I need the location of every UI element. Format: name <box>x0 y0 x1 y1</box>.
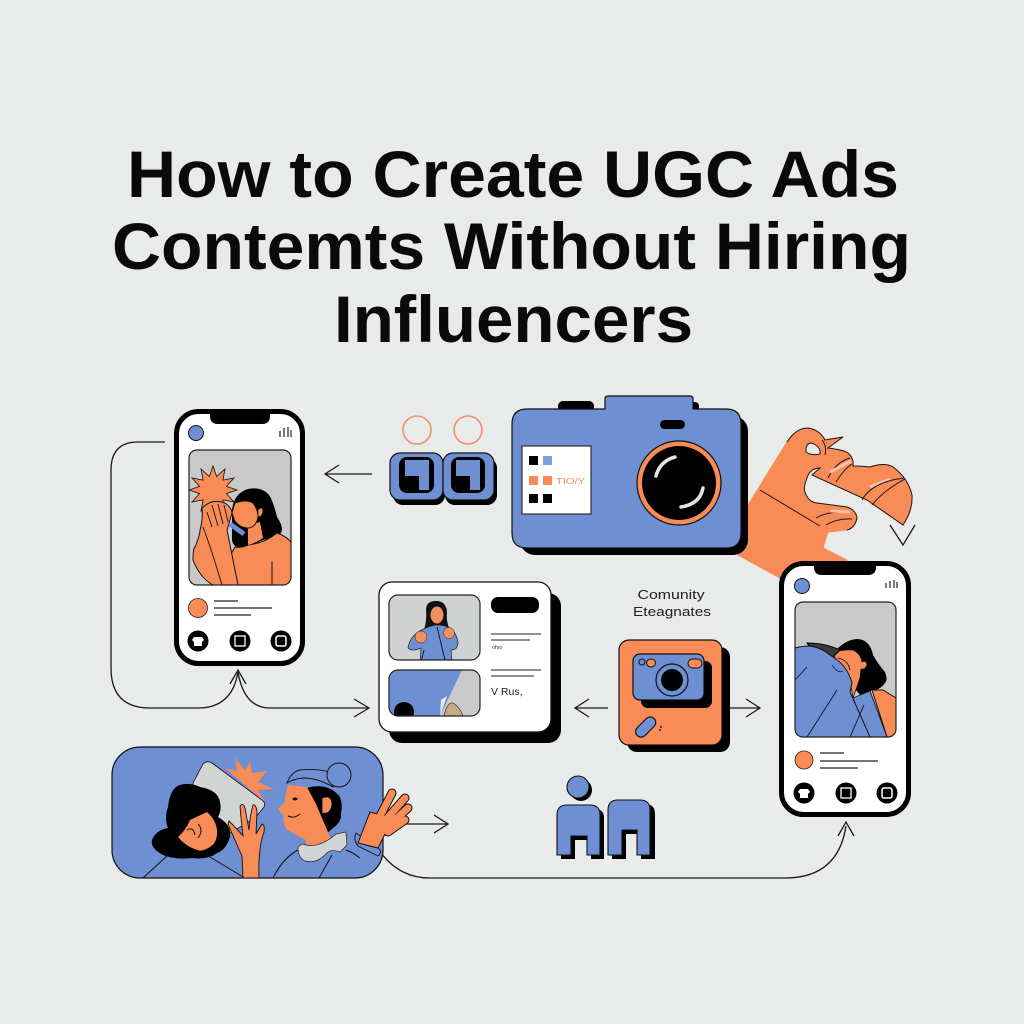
label: community: Eteagnates <box>633 605 711 619</box>
viewfinder <box>660 420 685 429</box>
photo: woman hugging <box>795 602 896 737</box>
card: content previews <box>379 582 561 743</box>
camera screen <box>522 446 591 514</box>
action buttons <box>794 782 898 804</box>
hand holding camera <box>738 428 912 590</box>
profile row <box>795 751 878 769</box>
raised hand <box>228 804 264 878</box>
action buttons <box>188 630 292 652</box>
small caption: nfso <box>492 645 502 651</box>
phone: left <box>176 410 302 664</box>
profile row <box>188 598 272 618</box>
phone: right <box>782 562 908 814</box>
panel: two friends <box>112 747 408 878</box>
flow arrows <box>111 442 915 878</box>
waving hand <box>355 793 408 856</box>
icon: outline circles <box>403 416 482 444</box>
photo: woman high five <box>189 450 291 585</box>
icon: quote blocks <box>390 453 497 505</box>
label: community: Comunity <box>638 588 705 602</box>
camera <box>512 396 748 555</box>
instant camera card <box>619 640 730 752</box>
right woman <box>308 786 342 832</box>
title: Contemts Without Hiring <box>112 209 911 283</box>
left woman <box>152 784 230 859</box>
camera screen: TIO/Y <box>556 476 585 486</box>
title <box>112 137 911 356</box>
phone card <box>193 762 265 835</box>
lens <box>637 441 721 525</box>
thumbnail: woman waving <box>389 595 480 662</box>
cap and bun <box>287 769 334 787</box>
title: How to Create UGC Ads <box>127 137 899 211</box>
caption: V Rus, <box>491 686 523 698</box>
collar <box>298 832 347 862</box>
title: Influencers <box>334 282 693 356</box>
label: community <box>633 588 711 619</box>
icon: community people <box>557 776 655 859</box>
label pill <box>491 597 539 613</box>
starburst <box>225 758 273 802</box>
thumbnail: blue scene <box>390 670 480 716</box>
